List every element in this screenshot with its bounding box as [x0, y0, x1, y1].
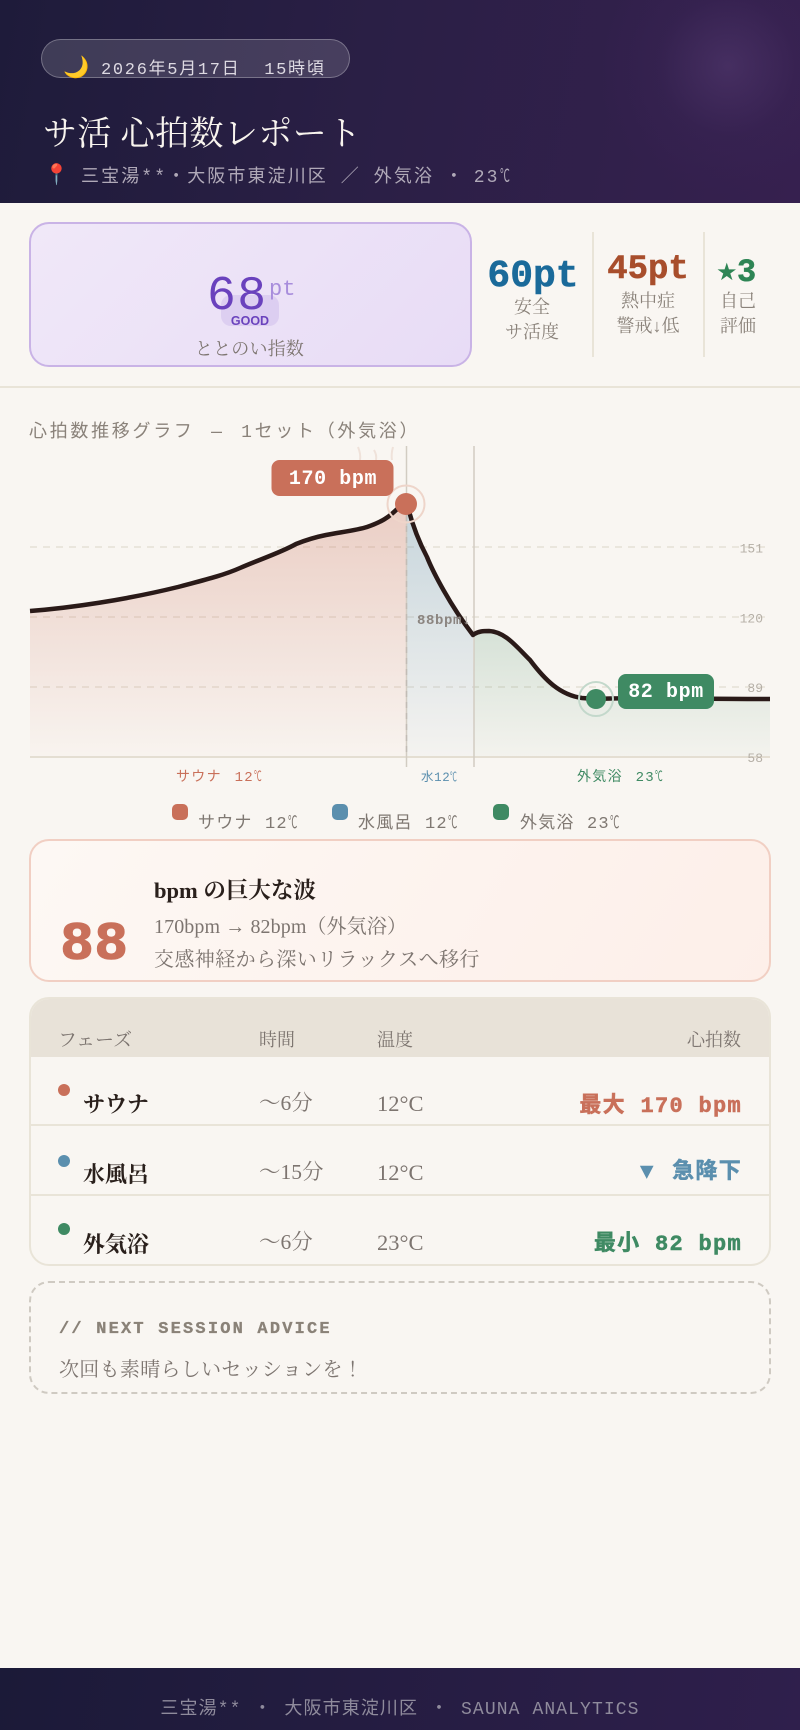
callout: peak bpm	[272, 460, 394, 496]
panel: next session advice	[29, 1281, 771, 1394]
header: temperature: 温度	[377, 1030, 413, 1050]
header band	[0, 0, 800, 203]
divider	[592, 232, 594, 357]
icon: location pin: 📍	[44, 162, 69, 186]
duration: 〜6分	[259, 1230, 313, 1254]
callout line 2: 交感神経から深いリラックスへ移行	[154, 949, 480, 971]
legend swatch: water	[332, 804, 348, 820]
axis labels	[740, 542, 763, 766]
axis labels: 120	[740, 612, 763, 626]
drop label: 88bpm↓	[417, 613, 471, 629]
phase label: outdoor: 外気浴 23	[577, 770, 655, 786]
baseline	[30, 756, 770, 758]
row: cold bath	[29, 1126, 771, 1196]
cold bath area	[406, 505, 474, 757]
bpm value: 最小 82 bpm	[594, 1232, 742, 1257]
phase dot	[58, 1084, 70, 1096]
temperature: 23°C	[377, 1230, 424, 1255]
dashed overlay	[406, 515, 408, 757]
big number: 88	[60, 914, 128, 971]
panel: totonoi score card	[29, 222, 472, 367]
row: sauna	[29, 1057, 771, 1126]
phase label: water: ℃	[450, 771, 457, 785]
icon: moon: 🌙	[63, 56, 89, 80]
header: phase: フェーズ	[58, 1030, 132, 1051]
steam marks	[358, 447, 393, 460]
chart heading: 心拍数推移グラフ — 1セット（外気浴）	[29, 423, 420, 443]
outdoor bath area	[474, 631, 770, 757]
phase name: 外気浴	[83, 1232, 149, 1257]
callout: min bpm: 82 bpm	[628, 681, 704, 704]
panel: score row	[0, 203, 800, 388]
metric caption: 安全 サ活度	[505, 297, 559, 342]
metric value: 45pt	[607, 251, 689, 289]
metric: safety	[487, 255, 579, 342]
chart: heart rate	[30, 446, 770, 767]
phase label: sauna: ℃	[254, 770, 262, 786]
min marker	[579, 682, 613, 716]
date pill	[41, 39, 350, 78]
phase dot	[58, 1155, 70, 1167]
legend label: water: ℃	[448, 815, 457, 834]
panel: phase table	[29, 997, 771, 1266]
metric: self rating	[716, 254, 756, 336]
phase dot	[58, 1223, 70, 1235]
good badge background	[221, 295, 279, 326]
metric value: 3	[737, 254, 756, 291]
metric value: 60pt	[487, 255, 579, 298]
footer text: 三宝湯** ・ 大阪市東淀川区 ・ SAUNA ANALYTICS	[160, 1700, 640, 1720]
callout heading: bpm の巨大な波	[154, 878, 316, 903]
footer band	[0, 1668, 800, 1730]
axis labels: 89	[747, 681, 763, 696]
temperature: 12°C	[377, 1091, 424, 1116]
legend swatch: outdoor	[493, 804, 509, 820]
legend swatch: sauna	[172, 804, 188, 820]
metric caption: 熱中症 警戒↓低	[616, 291, 680, 336]
heart rate line	[30, 500, 770, 699]
axis labels: 58	[747, 751, 763, 766]
score unit: pt	[269, 277, 295, 302]
table header	[29, 997, 771, 1057]
divider	[703, 232, 705, 357]
phase label: sauna: サウナ 12	[176, 770, 254, 786]
row: outdoor	[58, 1223, 742, 1257]
callout: min bpm	[618, 674, 714, 709]
phase name: サウナ	[83, 1092, 149, 1117]
phase name: 水風呂	[83, 1162, 149, 1187]
duration: 〜15分	[259, 1160, 324, 1184]
date text: 2026年5月17日 15時頃	[101, 61, 325, 80]
phase divider: sauna to bath	[406, 446, 408, 767]
temperature: 12°C	[377, 1160, 424, 1185]
phase label: water: 水12	[421, 771, 450, 785]
panel: bpm wave callout	[29, 839, 771, 982]
location text: 三宝湯**・大阪市東淀川区 ／ 外気浴 ・ 23	[81, 168, 500, 188]
axis labels: 151	[740, 542, 763, 556]
duration: 〜6分	[259, 1091, 313, 1115]
phase label: outdoor: ℃	[655, 770, 663, 786]
phase divider: bath to outdoor	[473, 446, 475, 767]
score value: 68	[207, 270, 268, 324]
header: time: 時間	[259, 1030, 295, 1050]
location text: ℃	[500, 168, 509, 188]
callout: peak bpm: 170 bpm	[289, 468, 377, 491]
good label: GOOD	[231, 314, 269, 328]
legend label: sauna: サウナ 12	[198, 815, 288, 834]
legend	[172, 804, 619, 834]
legend label: water: 水風呂 12	[358, 815, 448, 834]
sauna area	[30, 500, 406, 757]
bpm value: ▼ 急降下	[640, 1160, 742, 1185]
advice label: // NEXT SESSION ADVICE	[59, 1320, 332, 1339]
metric caption: 自己 評価	[720, 291, 756, 336]
peak marker	[388, 486, 424, 522]
advice text: 次回も素晴らしいセッションを！	[59, 1359, 363, 1381]
grid lines	[30, 547, 770, 687]
metric: heatstroke	[607, 251, 689, 336]
legend label: outdoor: 外気浴 23	[520, 815, 610, 834]
bpm value: 最大 170 bpm	[579, 1094, 742, 1119]
star: ★	[716, 258, 738, 286]
score caption: ととのい指数	[195, 339, 304, 359]
legend label: sauna: ℃	[288, 815, 297, 834]
header: heart rate: 心拍数	[687, 1030, 741, 1050]
callout line 1: 170bpm → 82bpm（外気浴）	[154, 916, 407, 938]
title: サ活 心拍数レポート	[43, 116, 362, 153]
legend label: outdoor: ℃	[610, 815, 619, 834]
